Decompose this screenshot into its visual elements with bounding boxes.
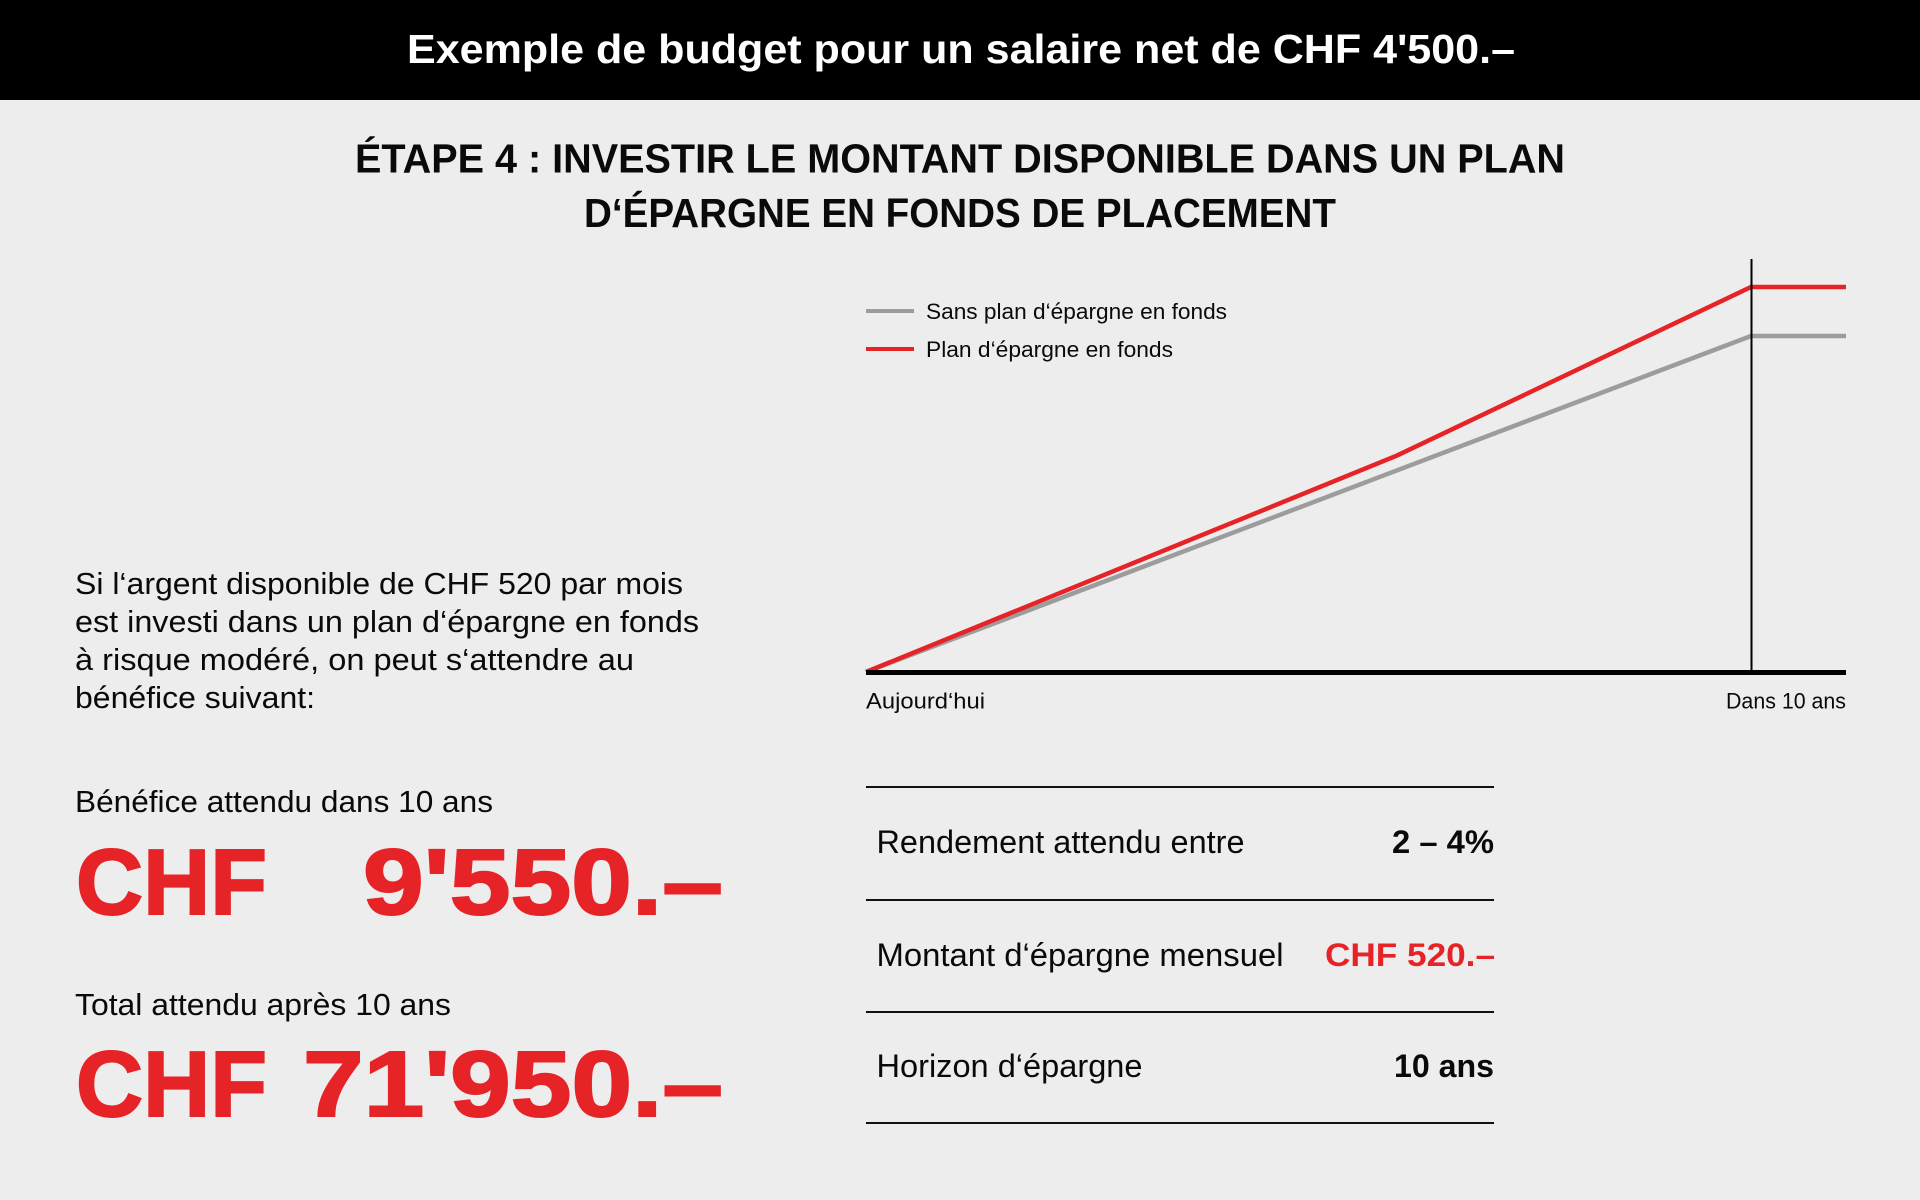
row: return [876, 824, 1494, 860]
header title: Exemple de budget pour un salaire net de CHF 4'500.– [407, 26, 1515, 72]
expected profit amount: CHF [76, 830, 267, 934]
expected total label: Total attendu après 10 ans [75, 987, 451, 1022]
row: monthly savings: Montant d‘épargne mensuel [876, 937, 1284, 973]
intro paragraph: Si l‘argent disponible de CHF 520 par mois [75, 566, 683, 601]
step heading [355, 136, 1565, 236]
row: monthly savings: CHF 520.– [1325, 937, 1495, 973]
series: fund savings plan [866, 287, 1846, 672]
legend [866, 299, 1227, 362]
row: monthly savings [876, 937, 1495, 973]
step heading: ÉTAPE 4 : INVESTIR LE MONTANT DISPONIBLE DANS UN PLAN [355, 136, 1565, 182]
expected profit label: Bénéfice attendu dans 10 ans [75, 784, 493, 819]
line chart [866, 259, 1846, 714]
legend: Sans plan d‘épargne en fonds [926, 299, 1227, 324]
header banner [0, 0, 1920, 100]
axis label ten years: Dans 10 ans [1726, 688, 1846, 714]
row: return: 2 – 4% [1392, 824, 1494, 860]
row: return: Rendement attendu entre [876, 824, 1244, 860]
row: horizon: 10 ans [1394, 1048, 1494, 1084]
intro paragraph [75, 566, 699, 715]
ten year marker [1750, 259, 1752, 672]
time axis [866, 670, 1846, 675]
legend: Plan d‘épargne en fonds [926, 337, 1173, 362]
intro paragraph: à risque modéré, on peut s‘attendre au [75, 642, 634, 677]
expected total amount: CHF [76, 1032, 267, 1136]
axis label today: Aujourd‘hui [866, 688, 985, 714]
expected total amount: 71'950.– [303, 1032, 723, 1136]
expected profit amount [76, 830, 723, 934]
summary table [866, 787, 1495, 1123]
expected profit amount: 9'550.– [363, 830, 723, 934]
row: horizon: Horizon d‘épargne [876, 1048, 1142, 1084]
expected total amount [76, 1032, 723, 1136]
intro paragraph: est investi dans un plan d‘épargne en fonds [75, 604, 699, 639]
intro paragraph: bénéfice suivant: [75, 680, 315, 715]
series: without fund savings plan [866, 336, 1846, 672]
step heading: D‘ÉPARGNE EN FONDS DE PLACEMENT [584, 190, 1336, 236]
row: horizon [876, 1048, 1494, 1084]
